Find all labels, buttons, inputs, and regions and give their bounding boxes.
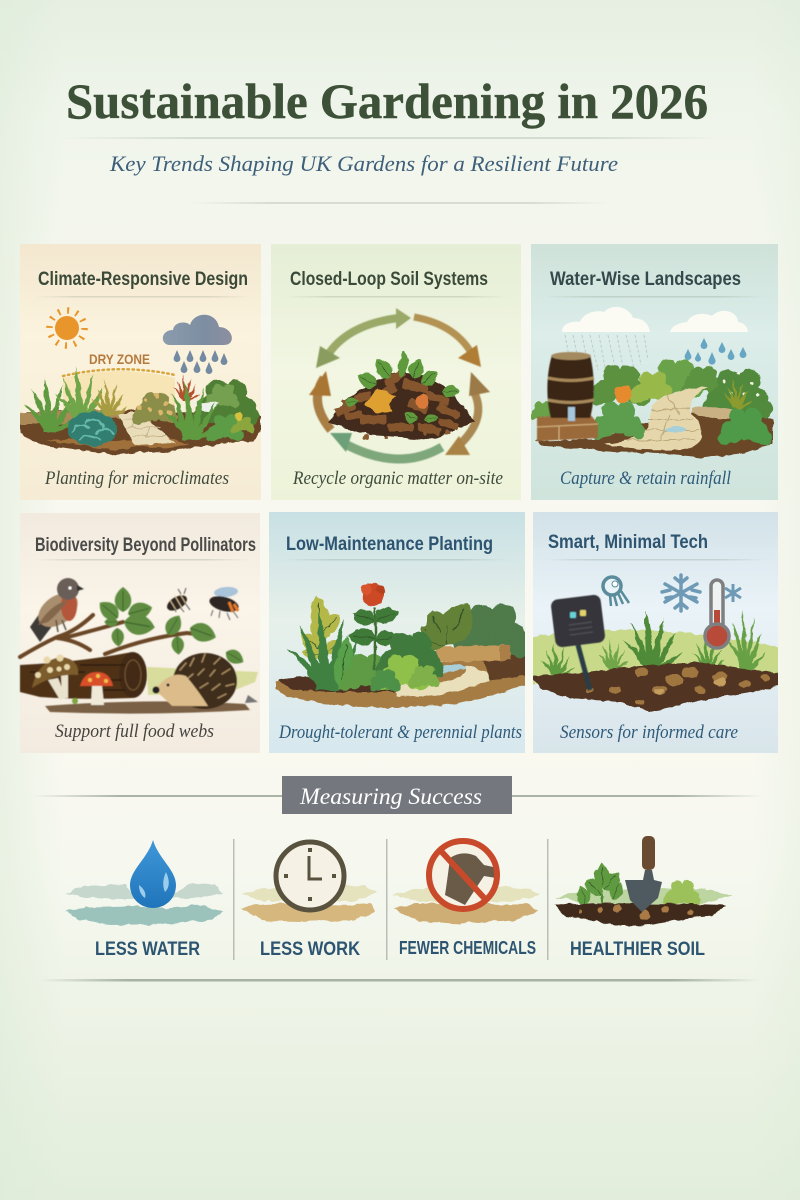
caption: Support full food webs <box>55 721 214 742</box>
dry zone arc <box>63 369 175 415</box>
caption: Planting for microclimates <box>44 468 229 489</box>
panel: biodiversity beyond pollinators <box>20 513 260 753</box>
label: HEALTHIER SOIL <box>570 939 705 960</box>
icon: sun <box>50 310 84 346</box>
metric: less work <box>241 842 377 960</box>
caption: Recycle organic matter on-site <box>292 468 503 489</box>
icon: rain cloud <box>163 315 232 374</box>
illustration: log and mushrooms <box>20 652 250 714</box>
illustration: robin <box>30 578 84 642</box>
metric: healthier soil <box>555 836 732 960</box>
icon: small snowflake <box>725 584 741 602</box>
heading: smart, minimal tech: Smart, Minimal Tech <box>548 532 708 553</box>
heading: biodiversity beyond pollinators: Biodiversity Beyond Pollinators <box>35 535 256 556</box>
illustration: branch and leaves <box>20 587 247 668</box>
panel: closed-loop soil systems <box>271 244 521 500</box>
icon: snowflake <box>662 575 700 611</box>
icon: beetle <box>164 588 190 614</box>
illustration: compost pile <box>328 351 474 440</box>
illustration: rain barrel <box>537 352 598 441</box>
heading: low-maintenance planting: Low-Maintenance Planting <box>286 534 493 555</box>
caption: Sensors for informed care <box>560 722 738 743</box>
subtitle: Key Trends Shaping UK Gardens for a Resilient Future <box>109 151 618 176</box>
icon: clouds and rain <box>562 307 748 378</box>
panel: smart, minimal tech <box>528 512 783 753</box>
illustration: hedgehog <box>147 653 258 709</box>
icon: clock <box>241 842 377 922</box>
illustration: rain barrel garden <box>530 359 773 458</box>
label: dry zone: DRY ZONE <box>89 351 150 367</box>
label: LESS WATER <box>95 939 200 960</box>
illustration: planted bed <box>20 367 261 455</box>
label: LESS WORK <box>260 939 360 960</box>
section banner: measuring success: Measuring Success <box>299 784 482 809</box>
panel: climate-responsive design <box>20 244 261 500</box>
title: Sustainable Gardening in 2026 <box>66 73 708 129</box>
caption: Capture & retain rainfall <box>560 468 731 489</box>
heading: water-wise landscapes: Water-Wise Landscapes <box>550 269 741 290</box>
heading: closed-loop soil systems: Closed-Loop Soil Systems <box>290 269 488 290</box>
icon: spade and soil <box>555 836 732 926</box>
icon: thermometer <box>705 580 729 648</box>
metric: fewer chemicals <box>393 841 539 958</box>
icon: soil sensor <box>550 594 606 690</box>
caption: Drought-tolerant & perennial plants <box>278 722 522 743</box>
icon: circular arrows <box>309 308 490 459</box>
icon: no chemicals <box>393 841 539 924</box>
icon: water drop <box>65 840 223 925</box>
panel: water-wise landscapes <box>530 244 778 500</box>
icon: bee <box>208 586 240 620</box>
section banner: measuring success <box>282 776 512 814</box>
heading: climate-responsive design: Climate-Responsive Design <box>38 269 248 290</box>
panel: low-maintenance planting <box>269 512 531 753</box>
icon: sprinkler <box>603 577 629 606</box>
illustration: hill and soil <box>528 610 783 712</box>
illustration: perennial bed <box>275 584 531 708</box>
metric: less water <box>65 840 223 960</box>
label: FEWER CHEMICALS <box>399 938 536 958</box>
